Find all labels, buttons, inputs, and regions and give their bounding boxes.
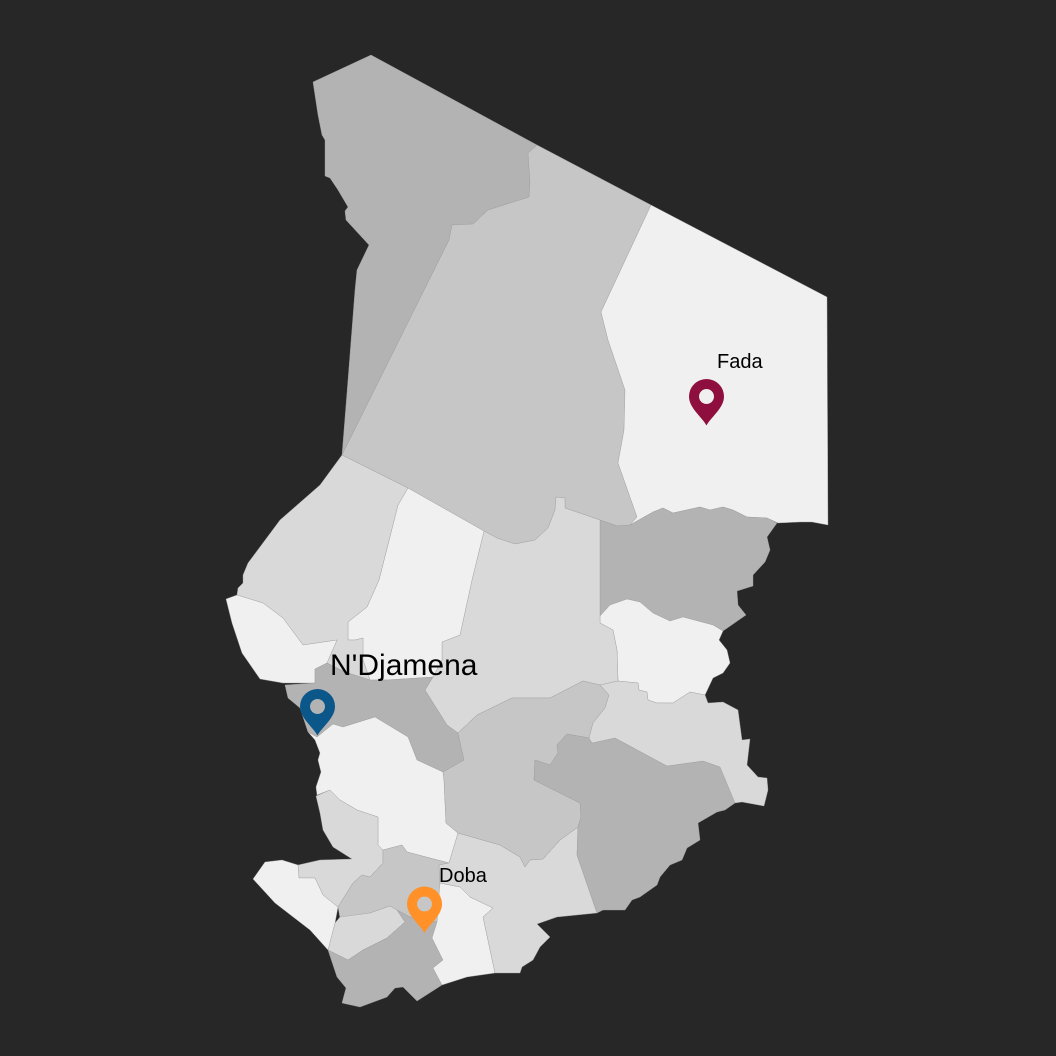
region: Kanem centre	[348, 488, 484, 680]
region: Sila	[589, 681, 768, 806]
region: Hadjer-Lamis south	[308, 717, 458, 863]
region: Lac	[226, 595, 337, 683]
region: Tandjile	[338, 845, 449, 922]
region: Bahr el Ghazal	[237, 455, 408, 680]
pin: N'Djamena	[300, 689, 335, 736]
region: Ouaddai	[600, 599, 730, 703]
region: Moyen-Chari	[439, 827, 597, 973]
region: Mayo-Kebbi Ouest	[328, 906, 405, 960]
region: Logone Oriental	[328, 910, 443, 1007]
pin: Doba	[407, 886, 442, 933]
region: Chari-Baguirmi	[285, 663, 464, 772]
region: Tibesti	[313, 55, 537, 455]
label: Doba: Doba	[439, 865, 488, 887]
map of Chad regions	[226, 55, 828, 1007]
region: Wadi Fira	[600, 507, 777, 631]
label: Fada: Fada	[717, 351, 763, 373]
region: Logone east	[432, 883, 495, 985]
pin: Fada	[689, 379, 724, 426]
region: Guera	[443, 681, 609, 867]
region: Borkou	[342, 145, 651, 544]
region: Salamat	[534, 734, 735, 913]
label: N'Djamena: N'Djamena	[330, 649, 478, 682]
region: far south-west	[253, 860, 338, 950]
region: Batha	[425, 497, 618, 733]
region: Mayo-Kebbi Est	[298, 790, 383, 907]
region: Ennedi	[601, 205, 828, 525]
